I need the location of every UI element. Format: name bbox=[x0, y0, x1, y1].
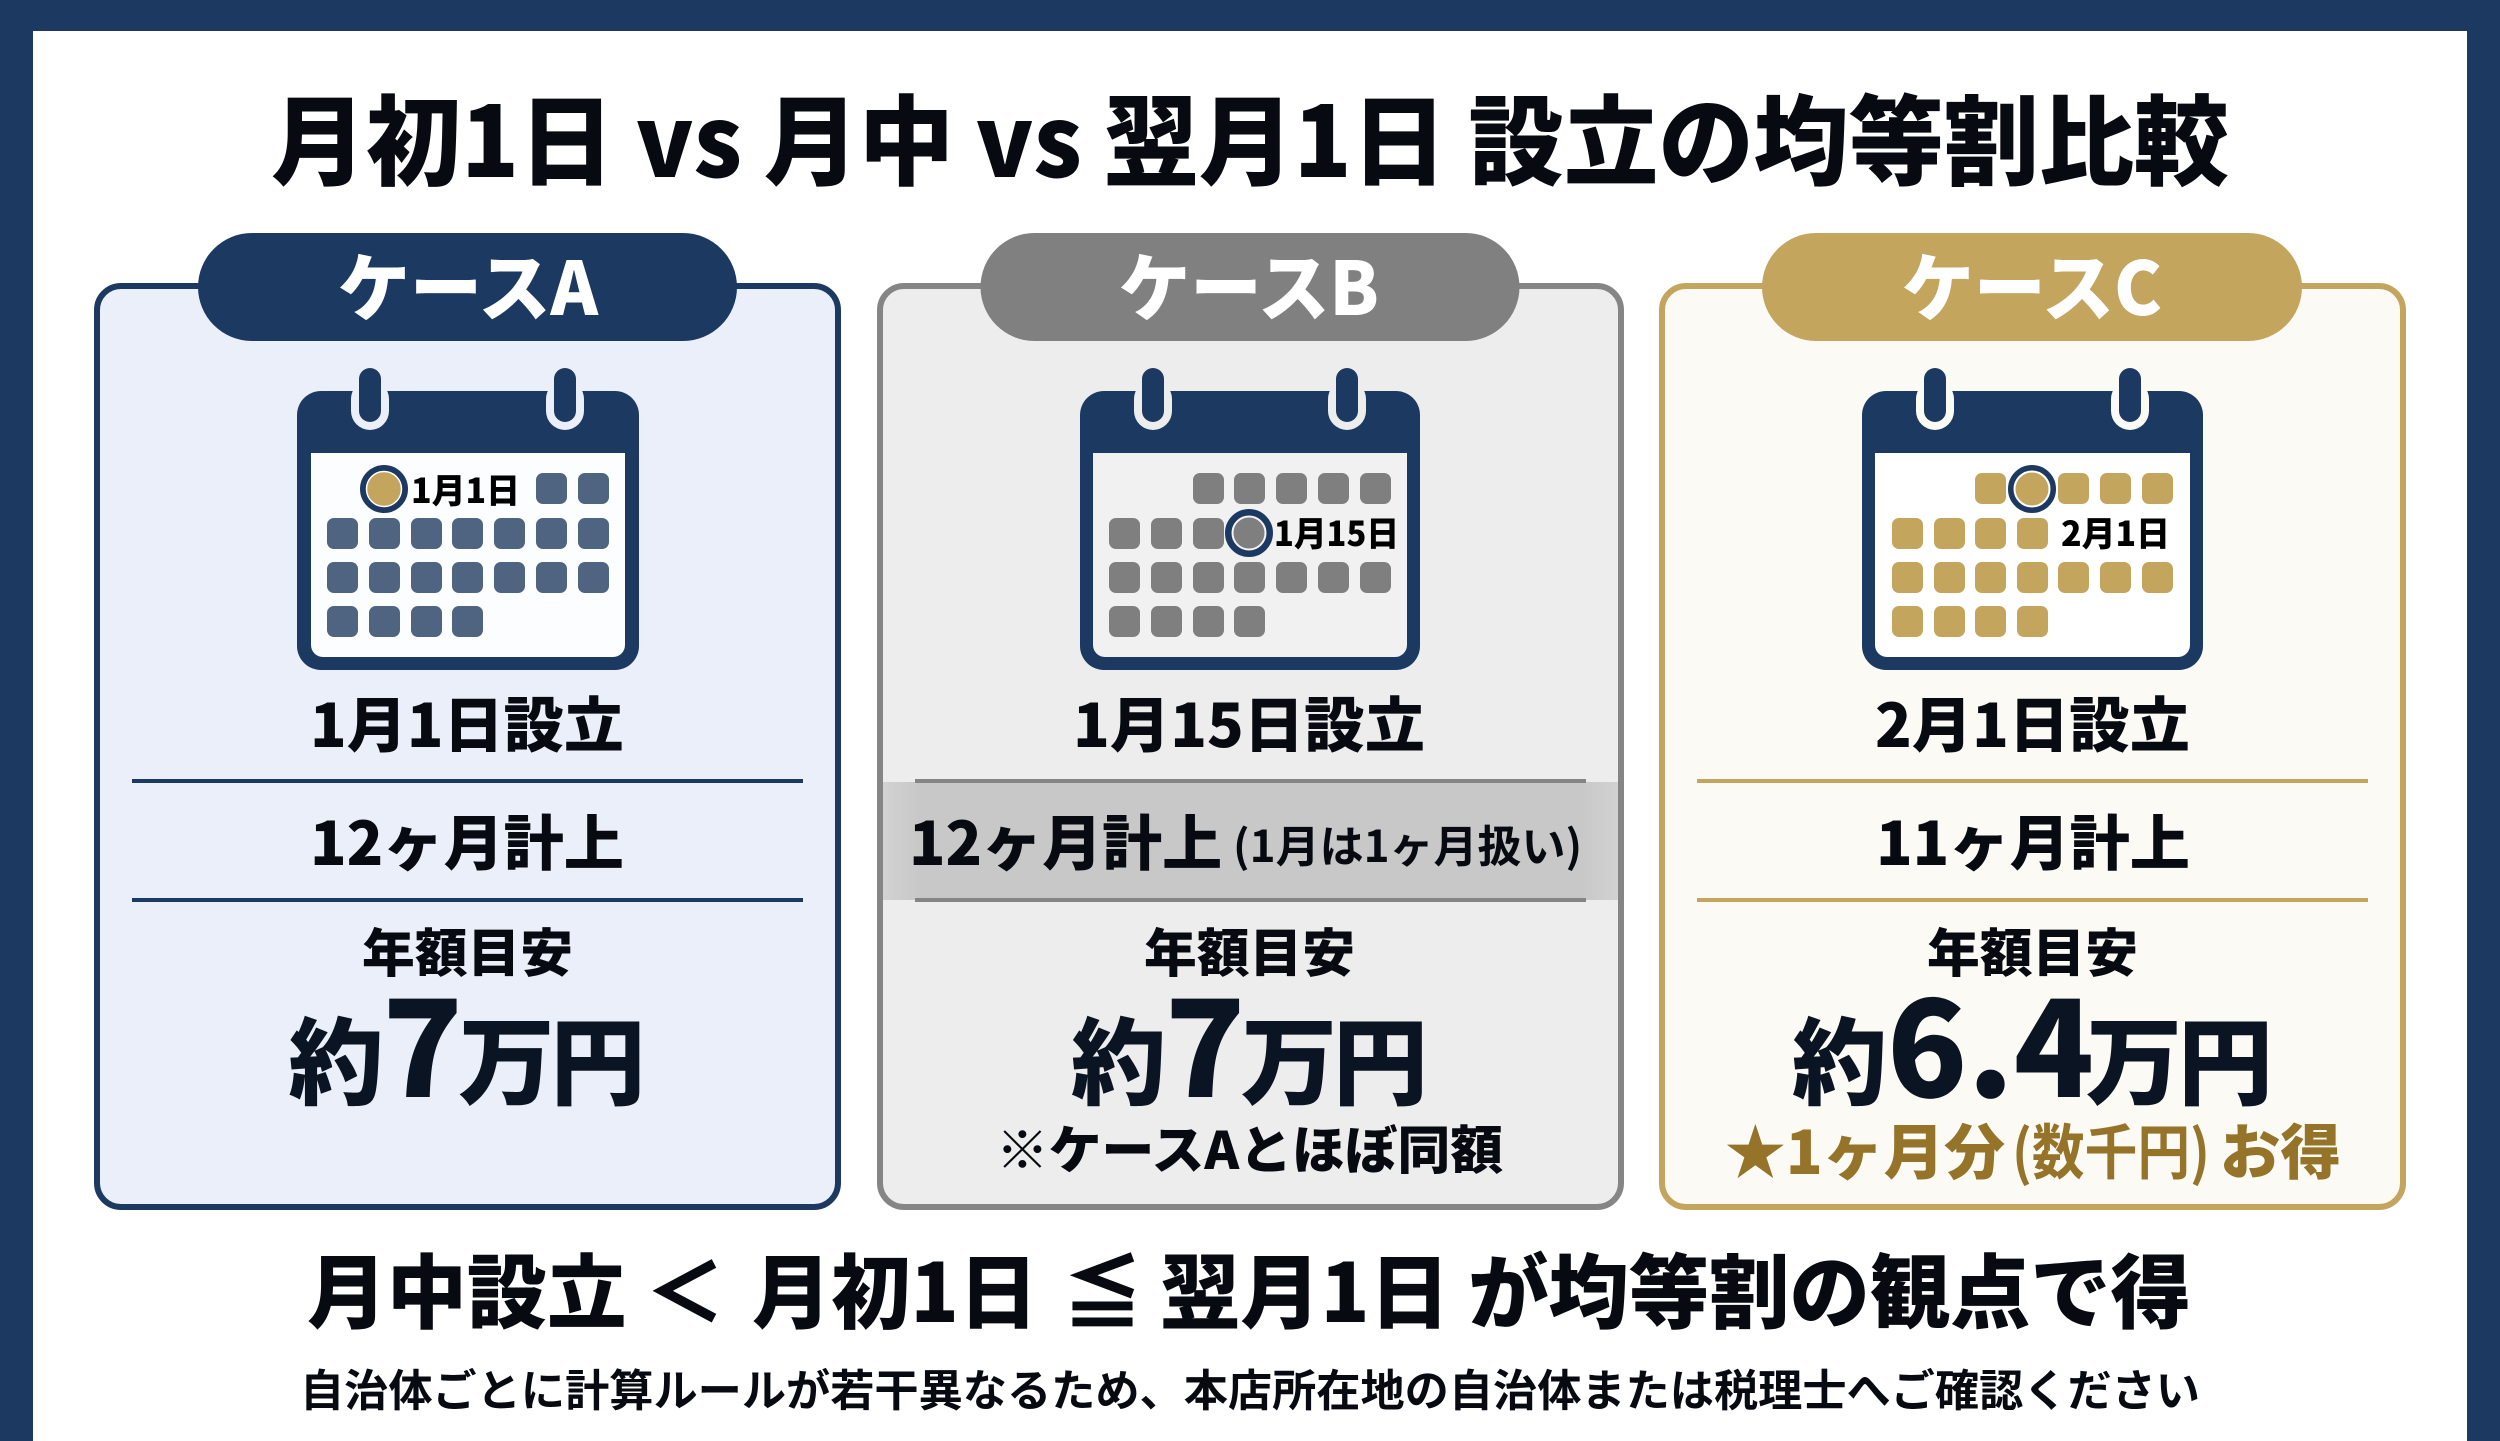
case C savings note: お得 bbox=[2220, 1105, 2341, 1192]
icon: calendar February 1: 2月1日 bbox=[2061, 507, 2170, 556]
case C months counted: 11ヶ月計上 bbox=[1876, 796, 2190, 883]
case B divider bottom bbox=[915, 898, 1586, 902]
case B months counted: (1月は1ヶ月扱い) bbox=[1233, 811, 1582, 875]
icon: calendar January 15: 1月15日 bbox=[1274, 507, 1399, 556]
icon: calendar February 1 bbox=[1862, 368, 2203, 670]
case A annual amount: 万 bbox=[458, 986, 554, 1125]
case C savings note bbox=[1725, 1105, 2341, 1192]
case B pill heading: ケースB bbox=[1119, 230, 1379, 337]
icon: calendar January 1 bbox=[297, 368, 639, 670]
case C divider bottom bbox=[1697, 898, 2368, 902]
case A annual label: 年額目安 bbox=[362, 912, 573, 987]
case A pill heading bbox=[198, 230, 737, 341]
case B pill heading bbox=[980, 230, 1520, 341]
case C annual amount: 約 bbox=[1792, 988, 1887, 1125]
case B highlight band bbox=[883, 782, 1618, 900]
title: 月初1日 vs 月中 vs 翌月1日 設立の均等割比較 bbox=[271, 64, 2229, 206]
panel: case A bbox=[97, 230, 838, 1207]
conclusion heading: 月初1日 bbox=[752, 1229, 1038, 1346]
case B card background bbox=[880, 286, 1621, 1207]
case C founding date: 2月1日設立 bbox=[1875, 678, 2190, 765]
case C divider top bbox=[1697, 779, 2368, 783]
case C pill heading: ケースC bbox=[1902, 230, 2162, 337]
case A months counted: 12ヶ月計上 bbox=[310, 796, 624, 883]
conclusion heading: ≦ bbox=[1062, 1229, 1143, 1346]
case A divider bottom bbox=[132, 898, 803, 902]
case C savings note: (数千円) bbox=[2012, 1105, 2210, 1192]
case C annual label: 年額目安 bbox=[1927, 912, 2138, 987]
case B note: ※ケースAとほぼ同額 bbox=[996, 1109, 1503, 1184]
case C pill heading bbox=[1762, 230, 2302, 341]
case A divider top bbox=[132, 779, 803, 783]
icon: calendar January 1: 1月1日 bbox=[411, 464, 520, 513]
case A annual amount: 約 bbox=[288, 988, 384, 1125]
case B annual amount: 万 bbox=[1241, 986, 1337, 1125]
case B months counted: 12ヶ月計上 bbox=[909, 796, 1222, 883]
case B annual label: 年額目安 bbox=[1144, 912, 1355, 987]
case C annual amount: 円 bbox=[2178, 988, 2273, 1125]
case C savings note: ★1ヶ月分 bbox=[1725, 1105, 2005, 1192]
case C card background bbox=[1662, 286, 2403, 1207]
case A pill heading: ケースA bbox=[338, 230, 599, 337]
case B divider top bbox=[915, 779, 1586, 783]
conclusion heading bbox=[307, 1229, 2191, 1346]
case C annual amount: 6.4 bbox=[1887, 945, 2094, 1136]
case B annual amount: 7 bbox=[1165, 945, 1245, 1136]
case A card background bbox=[97, 286, 838, 1207]
conclusion heading: 月中設立 ＜ bbox=[307, 1229, 725, 1346]
case B annual amount: 円 bbox=[1333, 988, 1428, 1125]
case B founding date: 1月15日設立 bbox=[1073, 678, 1425, 765]
footnote: 自治体ごとに計算ルールが若干異なるため、本店所在地の自治体または税理士へご確認ください bbox=[300, 1355, 2200, 1419]
case B annual amount: 約 bbox=[1071, 988, 1166, 1125]
case A founding date: 1月1日設立 bbox=[310, 678, 624, 765]
panel: case C bbox=[1662, 230, 2403, 1207]
conclusion heading: 翌月1日 が均等割の観点で得 bbox=[1160, 1229, 2191, 1346]
case A annual amount: 円 bbox=[550, 988, 646, 1125]
panel: case B bbox=[880, 230, 1621, 1207]
case A annual amount: 7 bbox=[382, 945, 463, 1136]
icon: calendar January 15 bbox=[1080, 368, 1420, 670]
case C annual amount: 万 bbox=[2086, 986, 2182, 1125]
